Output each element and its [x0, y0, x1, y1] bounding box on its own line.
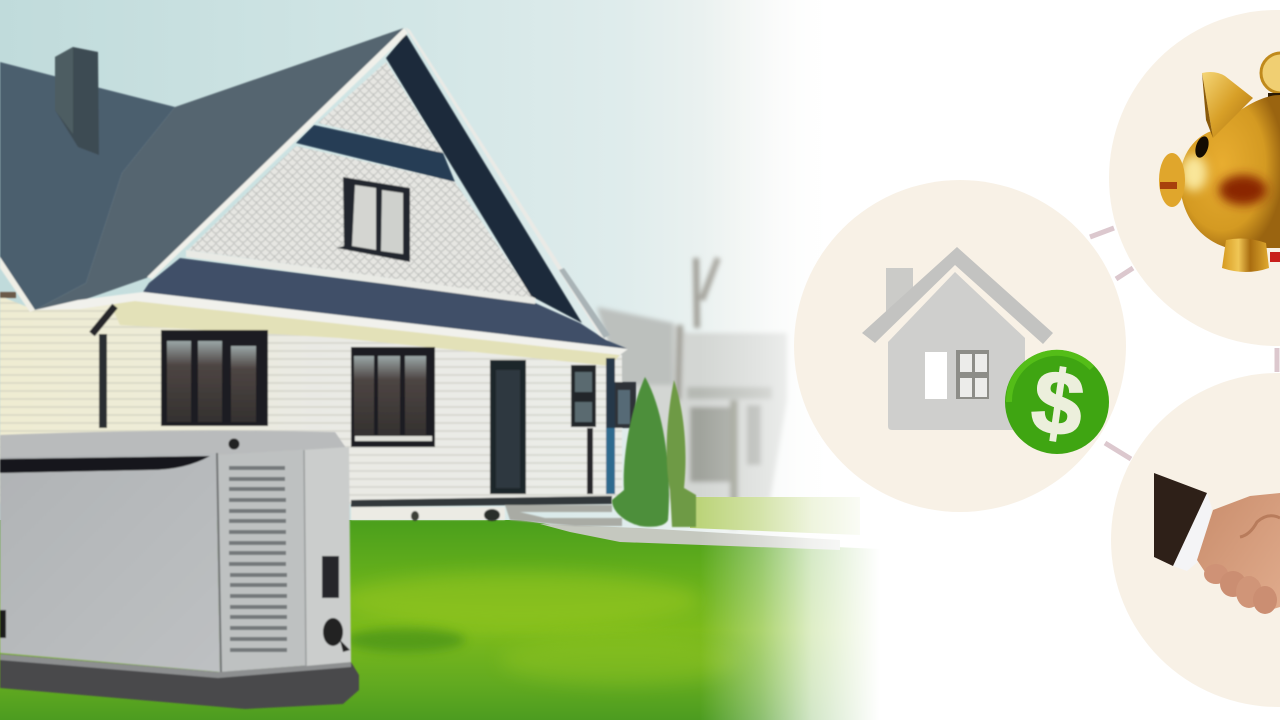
- generator: [0, 431, 359, 709]
- connector dashes: [1090, 228, 1277, 459]
- path: [540, 524, 840, 550]
- red reflection: [1219, 175, 1267, 205]
- generator top: [0, 431, 346, 462]
- circle: piggy bank: [1109, 10, 1280, 346]
- whitening fade: [700, 0, 880, 720]
- icon: dollar coin: [1005, 350, 1109, 457]
- porch posts: [606, 358, 615, 428]
- circle: handshake: [1111, 373, 1280, 707]
- main roof: [35, 28, 404, 310]
- foot: [1222, 239, 1269, 272]
- circle: house with dollar: [794, 180, 1126, 512]
- right window: [571, 365, 636, 428]
- sky background: [0, 0, 830, 560]
- generator front panel: [0, 453, 220, 672]
- outer right trim: [405, 27, 608, 340]
- generator vents: [229, 466, 287, 652]
- body: [1180, 95, 1280, 248]
- generator sockets: [322, 556, 339, 598]
- eye: [1193, 135, 1211, 159]
- gable band: [296, 125, 455, 182]
- chimney: [55, 47, 99, 155]
- ear: [1202, 72, 1253, 138]
- eave: [35, 292, 628, 355]
- lawn: [0, 520, 900, 720]
- shrubs: [612, 377, 696, 527]
- icon: dollar coin: $: [1026, 351, 1089, 457]
- snout: [1159, 153, 1185, 207]
- upper window: [337, 177, 410, 262]
- left roof: [0, 62, 175, 310]
- icon: golden piggy bank: [1159, 53, 1280, 272]
- porch base and steps: [351, 496, 612, 507]
- background neighbouring building: [597, 258, 787, 528]
- gable upper shingles: [318, 62, 443, 153]
- gable lower shingles: [188, 146, 533, 298]
- far lawn strip: [690, 497, 860, 535]
- downspout: [92, 306, 115, 334]
- coin: [1261, 53, 1280, 93]
- gable left trim: [147, 28, 408, 279]
- generator side panel: [216, 447, 351, 672]
- icon: house: [862, 247, 1053, 430]
- icon: handshake: [1154, 473, 1280, 614]
- soffit: [110, 301, 620, 366]
- house: [0, 27, 636, 526]
- gable dark trim: [386, 34, 582, 323]
- lower roof: [143, 258, 628, 349]
- centre window: [351, 347, 435, 447]
- generator slot: [0, 456, 210, 473]
- generator base: [0, 654, 359, 709]
- white right side: [880, 0, 1280, 720]
- left window: [161, 330, 268, 426]
- house wall: [0, 296, 622, 504]
- highlight: [1181, 155, 1207, 191]
- left trim: [0, 257, 35, 312]
- lower gable trim: [186, 250, 535, 304]
- door: [490, 360, 526, 494]
